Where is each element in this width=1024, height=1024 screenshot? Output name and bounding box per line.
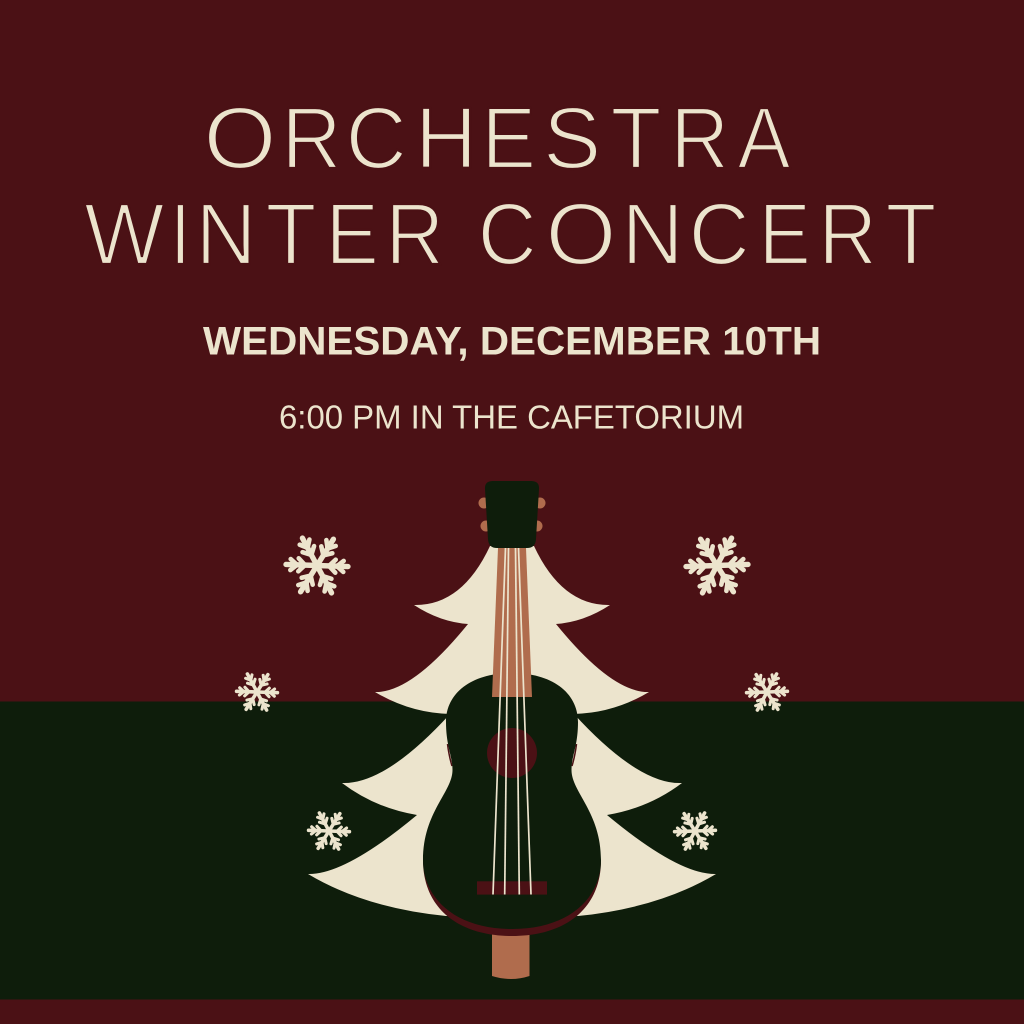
date line: WEDNESDAY, DECEMBER 10TH [203,319,821,363]
tuning pegs [478,498,546,532]
strings [493,548,531,894]
title line: WINTER CONCERT: E [759,186,811,283]
icon: snowflake middle left [236,671,278,713]
title line: WINTER CONCERT: R [386,186,444,283]
title line: WINTER CONCERT: C [689,186,750,283]
icon: snowflake lower right [674,810,716,852]
guitar body [423,673,601,929]
headstock [485,481,539,548]
icon: snowflake middle right [746,671,788,713]
illustration: guitar [423,481,601,936]
title line: WINTER CONCERT: E [326,186,379,283]
title line: WINTER CONCERT: T [266,186,316,283]
title line: ORCHESTRA: E [482,90,536,187]
title line: ORCHESTRA: R [670,90,729,187]
title line: ORCHESTRA: T [611,90,661,187]
title line: ORCHESTRA: A [738,90,790,187]
bridge [477,881,547,895]
title line: ORCHESTRA: C [346,90,407,187]
title line: ORCHESTRA [204,90,790,187]
green ground band [0,702,1024,1000]
title line: WINTER CONCERT: N [196,186,256,283]
title line: ORCHESTRA: S [543,90,601,187]
title line: WINTER CONCERT: W [84,186,164,283]
title line: WINTER CONCERT: C [478,186,537,283]
icon: snowflake upper right [685,534,749,597]
title line: ORCHESTRA: H [415,90,477,187]
title [84,90,936,283]
title line: WINTER CONCERT: R [818,186,877,283]
icon: guitar tree trunk [492,930,530,979]
icon: snowflake upper left [285,534,349,597]
icon: snowflake lower left [308,810,350,852]
guitar body shadow [423,744,601,936]
title line: WINTER CONCERT: T [886,186,936,283]
icon: Christmas tree [308,546,716,916]
title line: ORCHESTRA: O [204,90,276,187]
title line: ORCHESTRA: R [282,90,342,187]
title line: WINTER CONCERT: N [622,186,684,283]
title line: WINTER CONCERT: I [170,186,191,283]
time and place line: 6:00 PM IN THE CAFETORIUM [279,399,744,436]
neck [492,548,532,697]
title line: WINTER CONCERT [84,186,936,283]
title line: WINTER CONCERT: O [546,186,616,283]
sound hole [487,728,537,778]
